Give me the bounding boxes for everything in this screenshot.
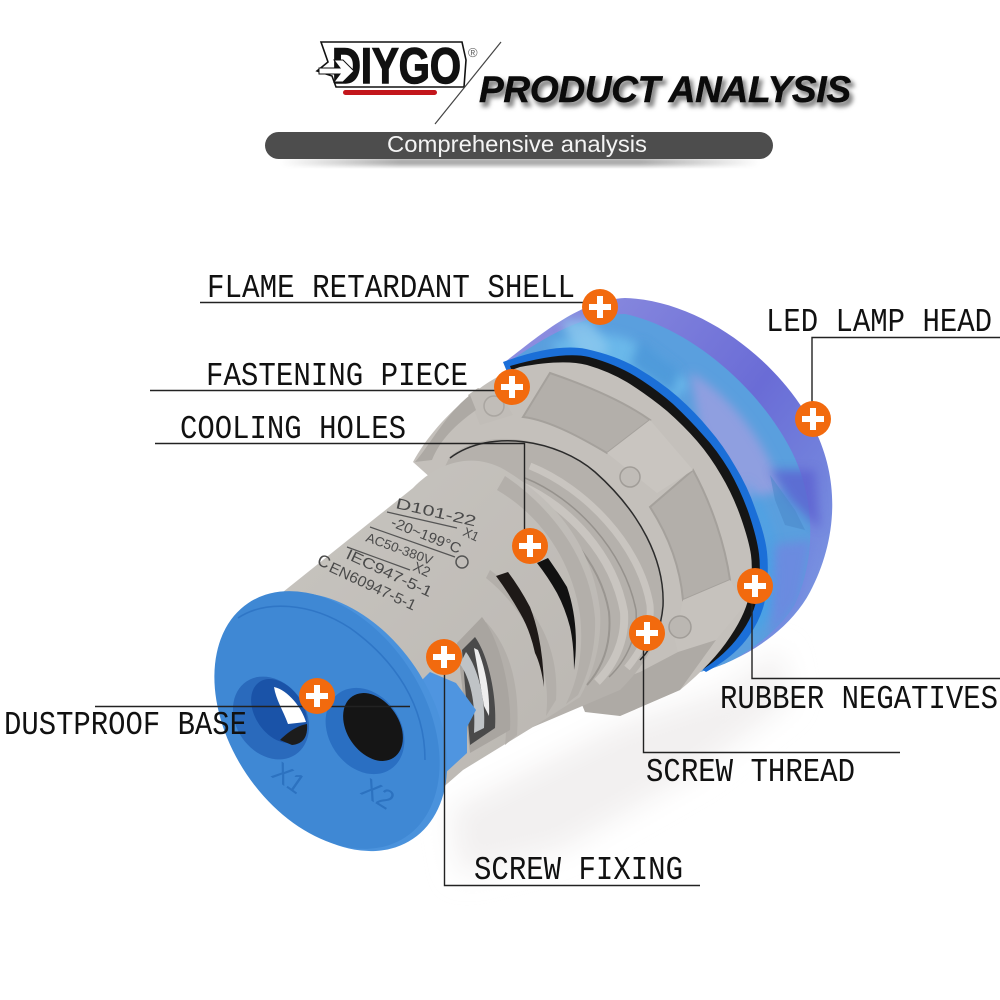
- label: dustproof base: DUSTPROOF BASE: [4, 707, 247, 744]
- subtitle bar: Comprehensive analysis: [387, 131, 647, 157]
- printed specifications: -20~199°C: [389, 515, 463, 557]
- label: cooling holes: [155, 411, 524, 545]
- printed specifications: IEC947-5-1: [343, 546, 435, 601]
- printed specifications: X2: [411, 558, 433, 580]
- title: product analysis: PRODUCT ANALYSIS: [479, 69, 851, 110]
- printed specifications: C: [314, 550, 333, 573]
- printed specifications: EN60947-5-1: [326, 559, 419, 614]
- product photo illustration: [214, 298, 832, 866]
- dustproof base: X2: [356, 773, 400, 816]
- label: rubber negatives: [720, 585, 1000, 718]
- LED lamp head: [500, 298, 832, 680]
- header: brand and title: [265, 38, 854, 166]
- body cylinder: [278, 461, 600, 790]
- label: flame retardant shell: FLAME RETARDANT SHELL: [207, 270, 575, 307]
- marker: shell: [582, 289, 618, 325]
- marker: lamp head: [795, 401, 831, 437]
- nut flat: right: [650, 470, 730, 600]
- logo: DIYGO: ®: [468, 45, 478, 60]
- marker: rubber negatives: [737, 568, 773, 604]
- printed specifications: [314, 495, 481, 614]
- body shaft and screw thread: [278, 439, 663, 790]
- rubber gasket: [510, 355, 760, 670]
- cylinder fins: [497, 476, 595, 704]
- fastening nut: [413, 362, 752, 716]
- label: LED lamp head: [766, 304, 1000, 418]
- marker: screw fixing: [426, 639, 462, 675]
- nut lug: lower: [675, 580, 745, 652]
- subtitle bar: [265, 131, 773, 166]
- terminal hole X1: [217, 662, 325, 774]
- printed specifications: D101-22: [394, 495, 478, 530]
- dustproof base: [168, 549, 494, 894]
- marker: fastening piece: [494, 369, 530, 405]
- label: screw thread: SCREW THREAD: [646, 754, 855, 791]
- logo: DIYGO: DIYGO: [332, 38, 461, 94]
- ground shadow: [450, 650, 790, 875]
- printed specifications: AC50-380V: [364, 530, 435, 568]
- terminal hole X2: [309, 673, 421, 789]
- divider slash: [435, 42, 501, 124]
- cooling slots: [496, 558, 576, 687]
- printed specifications: X1: [461, 524, 481, 544]
- dustproof base: X1: [267, 756, 311, 800]
- screw window: [457, 617, 510, 753]
- nut flat: upper: [523, 373, 650, 453]
- label: screw fixing: SCREW FIXING: [474, 852, 683, 889]
- marker: dustproof base: [299, 678, 335, 714]
- blue seal ring: [503, 348, 768, 672]
- label: cooling holes: COOLING HOLES: [180, 411, 406, 448]
- title: product analysis: PRODUCT ANALYSIS: [482, 73, 854, 114]
- marker: cooling holes: [512, 528, 548, 564]
- marker: screw thread: [629, 615, 665, 651]
- label: screw thread: [644, 633, 900, 791]
- hotspot markers: [299, 289, 831, 714]
- blue locking tab: [385, 672, 476, 790]
- label: fastening piece: FASTENING PIECE: [206, 358, 468, 395]
- nut lug: middle: [607, 420, 693, 493]
- label: screw fixing: [444, 657, 700, 889]
